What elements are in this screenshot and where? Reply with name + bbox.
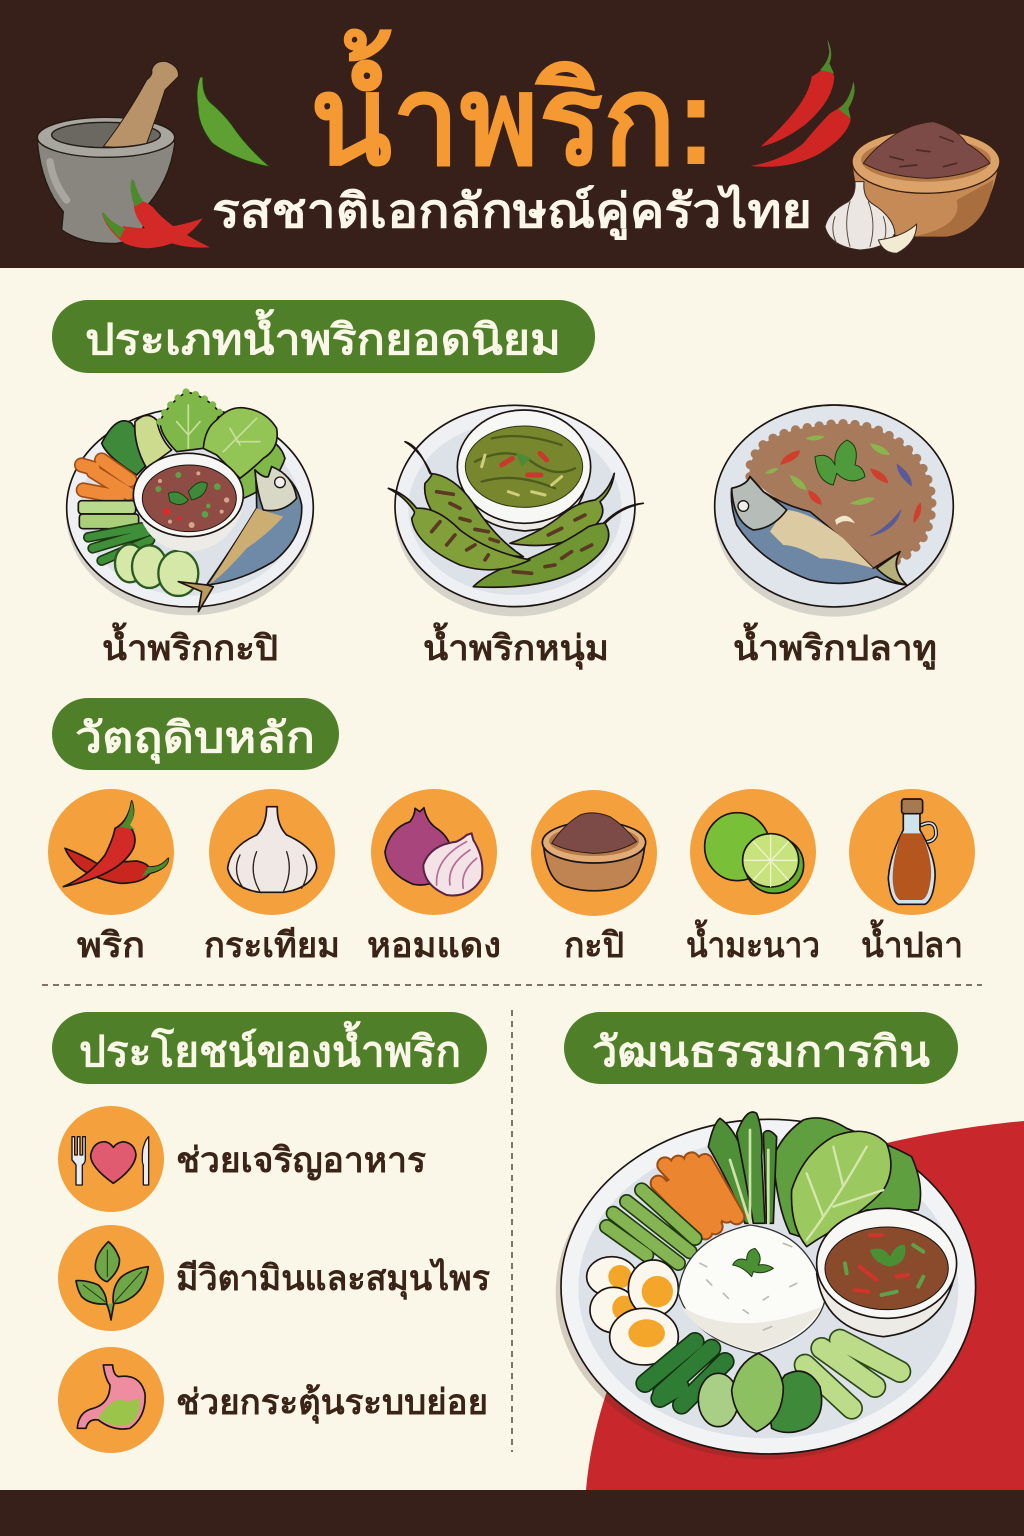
ingredient: fish sauce xyxy=(849,789,975,965)
footer band xyxy=(0,1490,1024,1536)
platter illustration xyxy=(556,1112,976,1459)
plate illustration 2 xyxy=(388,405,643,616)
ingredient: chilli xyxy=(48,789,174,965)
heading: popular types xyxy=(52,300,595,373)
plate illustration 1 xyxy=(66,392,314,615)
ingredient: garlic xyxy=(204,789,340,965)
ingredient: shrimp paste: กะปิ xyxy=(564,926,624,965)
subtitle: รสชาติเอกลักษณ์คู่ครัวไทย xyxy=(212,183,812,241)
benefit: vitamins xyxy=(58,1225,490,1331)
ingredient: fish sauce: น้ำปลา xyxy=(861,919,963,965)
label: น้ำพริกหนุ่ม xyxy=(423,622,609,670)
benefit: digestion xyxy=(58,1347,488,1453)
ingredient: chilli: พริก xyxy=(77,926,145,965)
heading: main ingredients: วัตถุดิบหลัก xyxy=(75,714,315,764)
label: น้ำพริกปลาทู xyxy=(733,622,937,670)
ingredient: shallot xyxy=(367,789,501,965)
benefit: appetite xyxy=(58,1106,426,1212)
icon: green chilli xyxy=(197,77,270,167)
header band xyxy=(0,0,1024,268)
heading: benefits: ประโยชน์ของน้ำพริก xyxy=(79,1020,461,1075)
ingredient: lime juice: น้ำมะนาว xyxy=(686,919,820,965)
label: น้ำพริกกะปิ xyxy=(102,622,278,668)
icon: garlic and clove xyxy=(825,182,917,253)
ingredient: shrimp paste xyxy=(531,790,657,965)
heading: eating culture xyxy=(564,1012,958,1084)
vertical divider xyxy=(511,1010,513,1452)
heading: eating culture: วัฒนธรรมการกิน xyxy=(592,1028,930,1075)
benefit: vitamins: มีวิตามินและสมุนไพร xyxy=(176,1257,490,1300)
red corner shape xyxy=(586,1121,1024,1490)
icon: paste bowl xyxy=(852,122,1000,237)
dish 2: nam phrik num xyxy=(388,405,643,670)
ingredient: lime juice xyxy=(686,789,820,965)
title: น้ำพริก: xyxy=(310,28,716,191)
dish 1: nam phrik kapi xyxy=(66,392,314,668)
icon: mortar and pestle with chillies xyxy=(37,61,210,248)
heading: benefits xyxy=(52,1012,487,1084)
plate illustration 3 xyxy=(714,405,954,617)
ingredient: garlic: กระเทียม xyxy=(204,926,340,965)
horizontal divider xyxy=(42,984,982,986)
icon: red chillies right xyxy=(751,39,855,167)
ingredient: shallot: หอมแดง xyxy=(367,926,501,965)
heading: popular types: ประเภทน้ำพริกยอดนิยม xyxy=(85,308,561,363)
heading: main ingredients xyxy=(52,698,339,770)
dish 3: nam phrik pla thu xyxy=(714,405,954,670)
benefit: digestion: ช่วยกระตุ้นระบบย่อย xyxy=(176,1383,488,1424)
benefit: appetite: ช่วยเจริญอาหาร xyxy=(176,1141,426,1181)
